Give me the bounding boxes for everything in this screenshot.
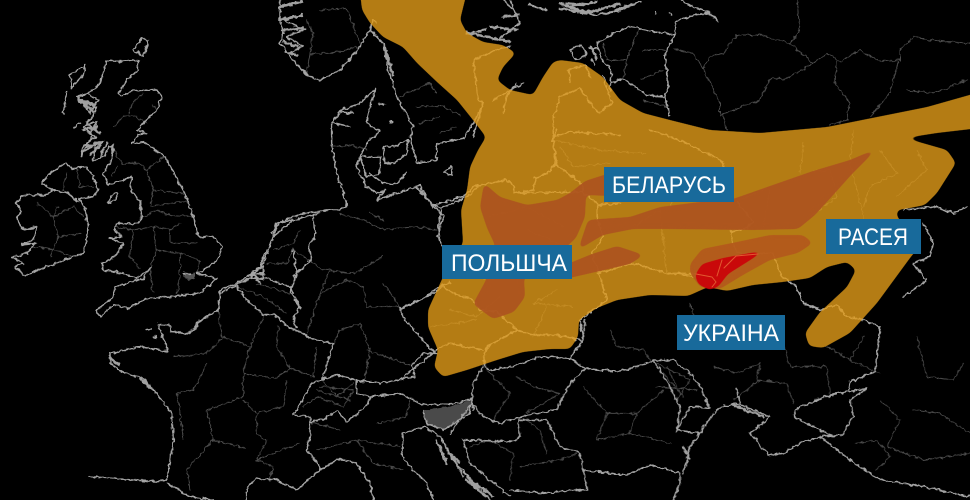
label: Russia: РАСЕЯ: [838, 224, 908, 251]
label: Belarus: БЕЛАРУСЬ: [612, 172, 726, 199]
borders crossing the plume area: [400, 130, 697, 380]
higher concentration: south-east Poland: [565, 246, 644, 279]
higher concentration: north Ukraine: [690, 235, 813, 289]
radiation plume: main orange area: [360, 0, 970, 377]
Eastern Baltic and Russia: [560, 0, 970, 130]
British Isles: [12, 38, 222, 316]
label: Poland: ПОЛЬШЧА: [451, 250, 567, 277]
higher concentration: Belarus band: [578, 148, 878, 250]
label: Russia: [826, 219, 921, 254]
Low Countries and Germany coast: [195, 213, 320, 330]
Scandinavia, Denmark and Baltic: [272, 0, 620, 240]
borders over red zone: [696, 254, 758, 287]
higher concentration: Poland: [473, 173, 610, 319]
label: Ukraine: УКРАІНА: [683, 320, 779, 347]
Balkans, Romania, Ukraine south: [450, 320, 970, 500]
Western and central Europe: [90, 250, 490, 500]
peak concentration: red zone: [695, 250, 766, 290]
